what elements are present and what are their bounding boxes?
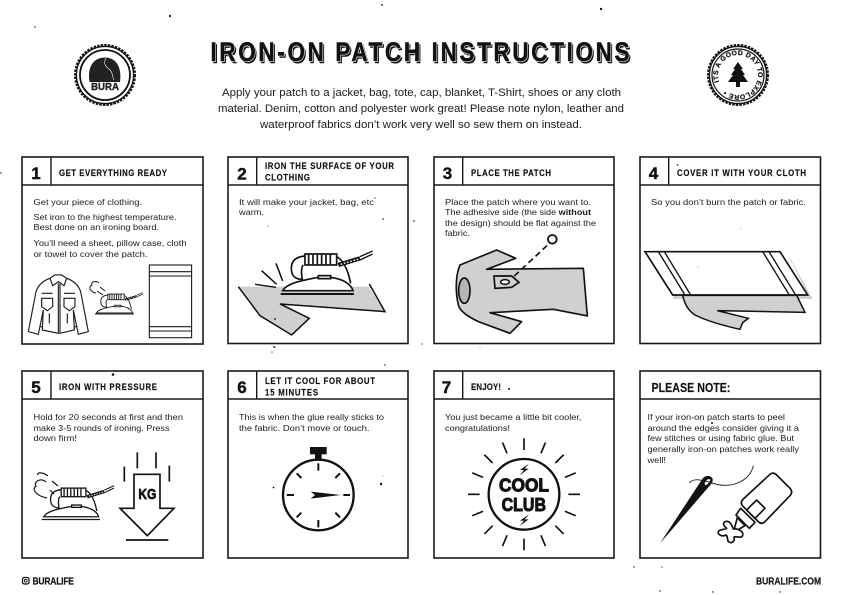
icon: cool club badge	[468, 438, 580, 550]
step 3 text: The adhesive side (the side without	[445, 207, 591, 217]
icon: KG weight arrow: KG	[138, 487, 156, 503]
step 6 text	[239, 412, 384, 433]
icon: needle and glue	[660, 466, 792, 543]
step 4 number: 4	[649, 164, 659, 183]
step 2 heading: CLOTHING	[265, 172, 310, 183]
step 3 text	[445, 197, 596, 238]
step 7 number: 7	[442, 378, 451, 397]
title: IRON-ON PATCH INSTRUCTIONS	[210, 38, 630, 67]
step 6 text: the fabric. Don’t move or touch.	[239, 423, 370, 433]
step 5 text: Hold for 20 seconds at first and then	[34, 412, 183, 422]
panel: step 5	[22, 371, 203, 558]
icon: KG weight arrow	[120, 452, 174, 540]
title: IRON-ON PATCH INSTRUCTIONS	[212, 40, 631, 69]
step 1 text: You’ll need a sheet, pillow case, cloth	[34, 238, 187, 248]
panel: step 3	[434, 157, 614, 344]
panel: step 7	[434, 371, 614, 558]
panel: step 1	[22, 157, 203, 344]
note text	[646, 412, 800, 465]
step 7 heading: ENJOY!	[471, 381, 501, 392]
step 6 heading	[265, 375, 376, 398]
step 7 text: congratulations!	[445, 423, 510, 433]
step 5 text: down firm!	[34, 433, 77, 443]
intro text: material. Denim, cotton and polyester work great! Please note nylon, leather and	[218, 103, 624, 115]
step 1 text: Best done on an ironing board.	[34, 222, 159, 232]
step 7 text	[445, 412, 582, 433]
illustration: shirt with patch	[456, 235, 587, 333]
note text: around the edges consider giving it a	[648, 423, 799, 433]
step 1 text	[34, 197, 187, 259]
intro text: waterproof fabrics don’t work very well so sew them on instead.	[259, 119, 582, 131]
logo: good day to explore badge: ITS A GOOD DAY TO EXPLORE •	[713, 50, 763, 100]
step 5 text: make 3-5 rounds of ironing. Press	[34, 423, 170, 433]
step 2 number: 2	[237, 164, 247, 184]
note text: few stitches or using fabric glue. But	[648, 433, 795, 443]
step 3 text: fabric.	[445, 228, 470, 238]
step 2 text	[238, 197, 375, 217]
step 6 number: 6	[237, 378, 247, 397]
step 1 text: or towel to cover the patch.	[34, 249, 148, 259]
panel: step 6	[228, 371, 408, 558]
step 2 heading: IRON THE SURFACE OF YOUR	[265, 160, 394, 171]
step 1 number: 1	[31, 164, 41, 183]
icon: small iron	[90, 282, 143, 314]
icon: iron with steam	[34, 473, 114, 520]
icon: jacket	[28, 275, 88, 334]
step 2 heading	[265, 160, 394, 183]
step 4 text: So you don’t burn the patch or fabric.	[651, 197, 806, 207]
step 5 heading: IRON WITH PRESSURE	[59, 381, 157, 392]
logo: Bura elephant badge: BURA	[91, 81, 119, 93]
note heading: PLEASE NOTE:	[652, 381, 730, 395]
icon: towel	[149, 265, 192, 338]
step 2 text: It will make your jacket, bag, etc	[239, 197, 375, 207]
panel: step 2	[228, 157, 408, 344]
note text: generally iron-on patches work really	[648, 444, 800, 454]
step 7 text: You just became a little bit cooler,	[445, 412, 582, 422]
footer: website: BURALIFE.COM	[756, 576, 821, 587]
step 3 text: Place the patch where you want to.	[445, 197, 591, 207]
step 3 text: the design) should be flat against the	[445, 218, 596, 228]
step 4 heading: COVER IT WITH YOUR CLOTH	[677, 167, 806, 178]
illustration: ironing fabric	[238, 251, 385, 335]
step 5 text	[34, 412, 183, 443]
step 6 text: This is when the glue really sticks to	[239, 412, 384, 422]
intro text: Apply your patch to a jacket, bag, tote, cap, blanket, T-Shirt, shoes or any cloth	[222, 87, 621, 99]
illustration: cloth over fabric	[645, 252, 813, 329]
step 3 number: 3	[443, 164, 452, 183]
step 1 heading: GET EVERYTHING READY	[59, 167, 167, 178]
step 2 text: warm.	[238, 207, 264, 217]
step 1 text: Set iron to the highest temperature.	[34, 212, 176, 222]
note text: well!	[646, 455, 666, 465]
title: IRON-ON PATCH INSTRUCTIONS	[210, 38, 630, 67]
step 5 number: 5	[31, 378, 41, 397]
logo: good day to explore badge	[707, 44, 769, 106]
step 1 text: Get your piece of clothing.	[34, 197, 142, 207]
intro text	[218, 87, 624, 131]
icon: cool club badge: COOL	[499, 475, 549, 496]
step 3 heading: PLACE THE PATCH	[471, 167, 551, 178]
footer: instagram handle: BURALIFE	[32, 576, 74, 587]
icon: cool club badge: CLUB	[502, 494, 546, 515]
icon: stopwatch	[283, 447, 354, 530]
logo: Bura elephant badge	[75, 45, 135, 105]
step 6 heading: 15 MINUTES	[265, 387, 318, 398]
note text: If your iron-on patch starts to peel	[648, 412, 785, 422]
step 6 heading: LET IT COOL FOR ABOUT	[265, 375, 376, 386]
panel: please note	[640, 371, 820, 558]
panel: step 4	[640, 157, 820, 344]
